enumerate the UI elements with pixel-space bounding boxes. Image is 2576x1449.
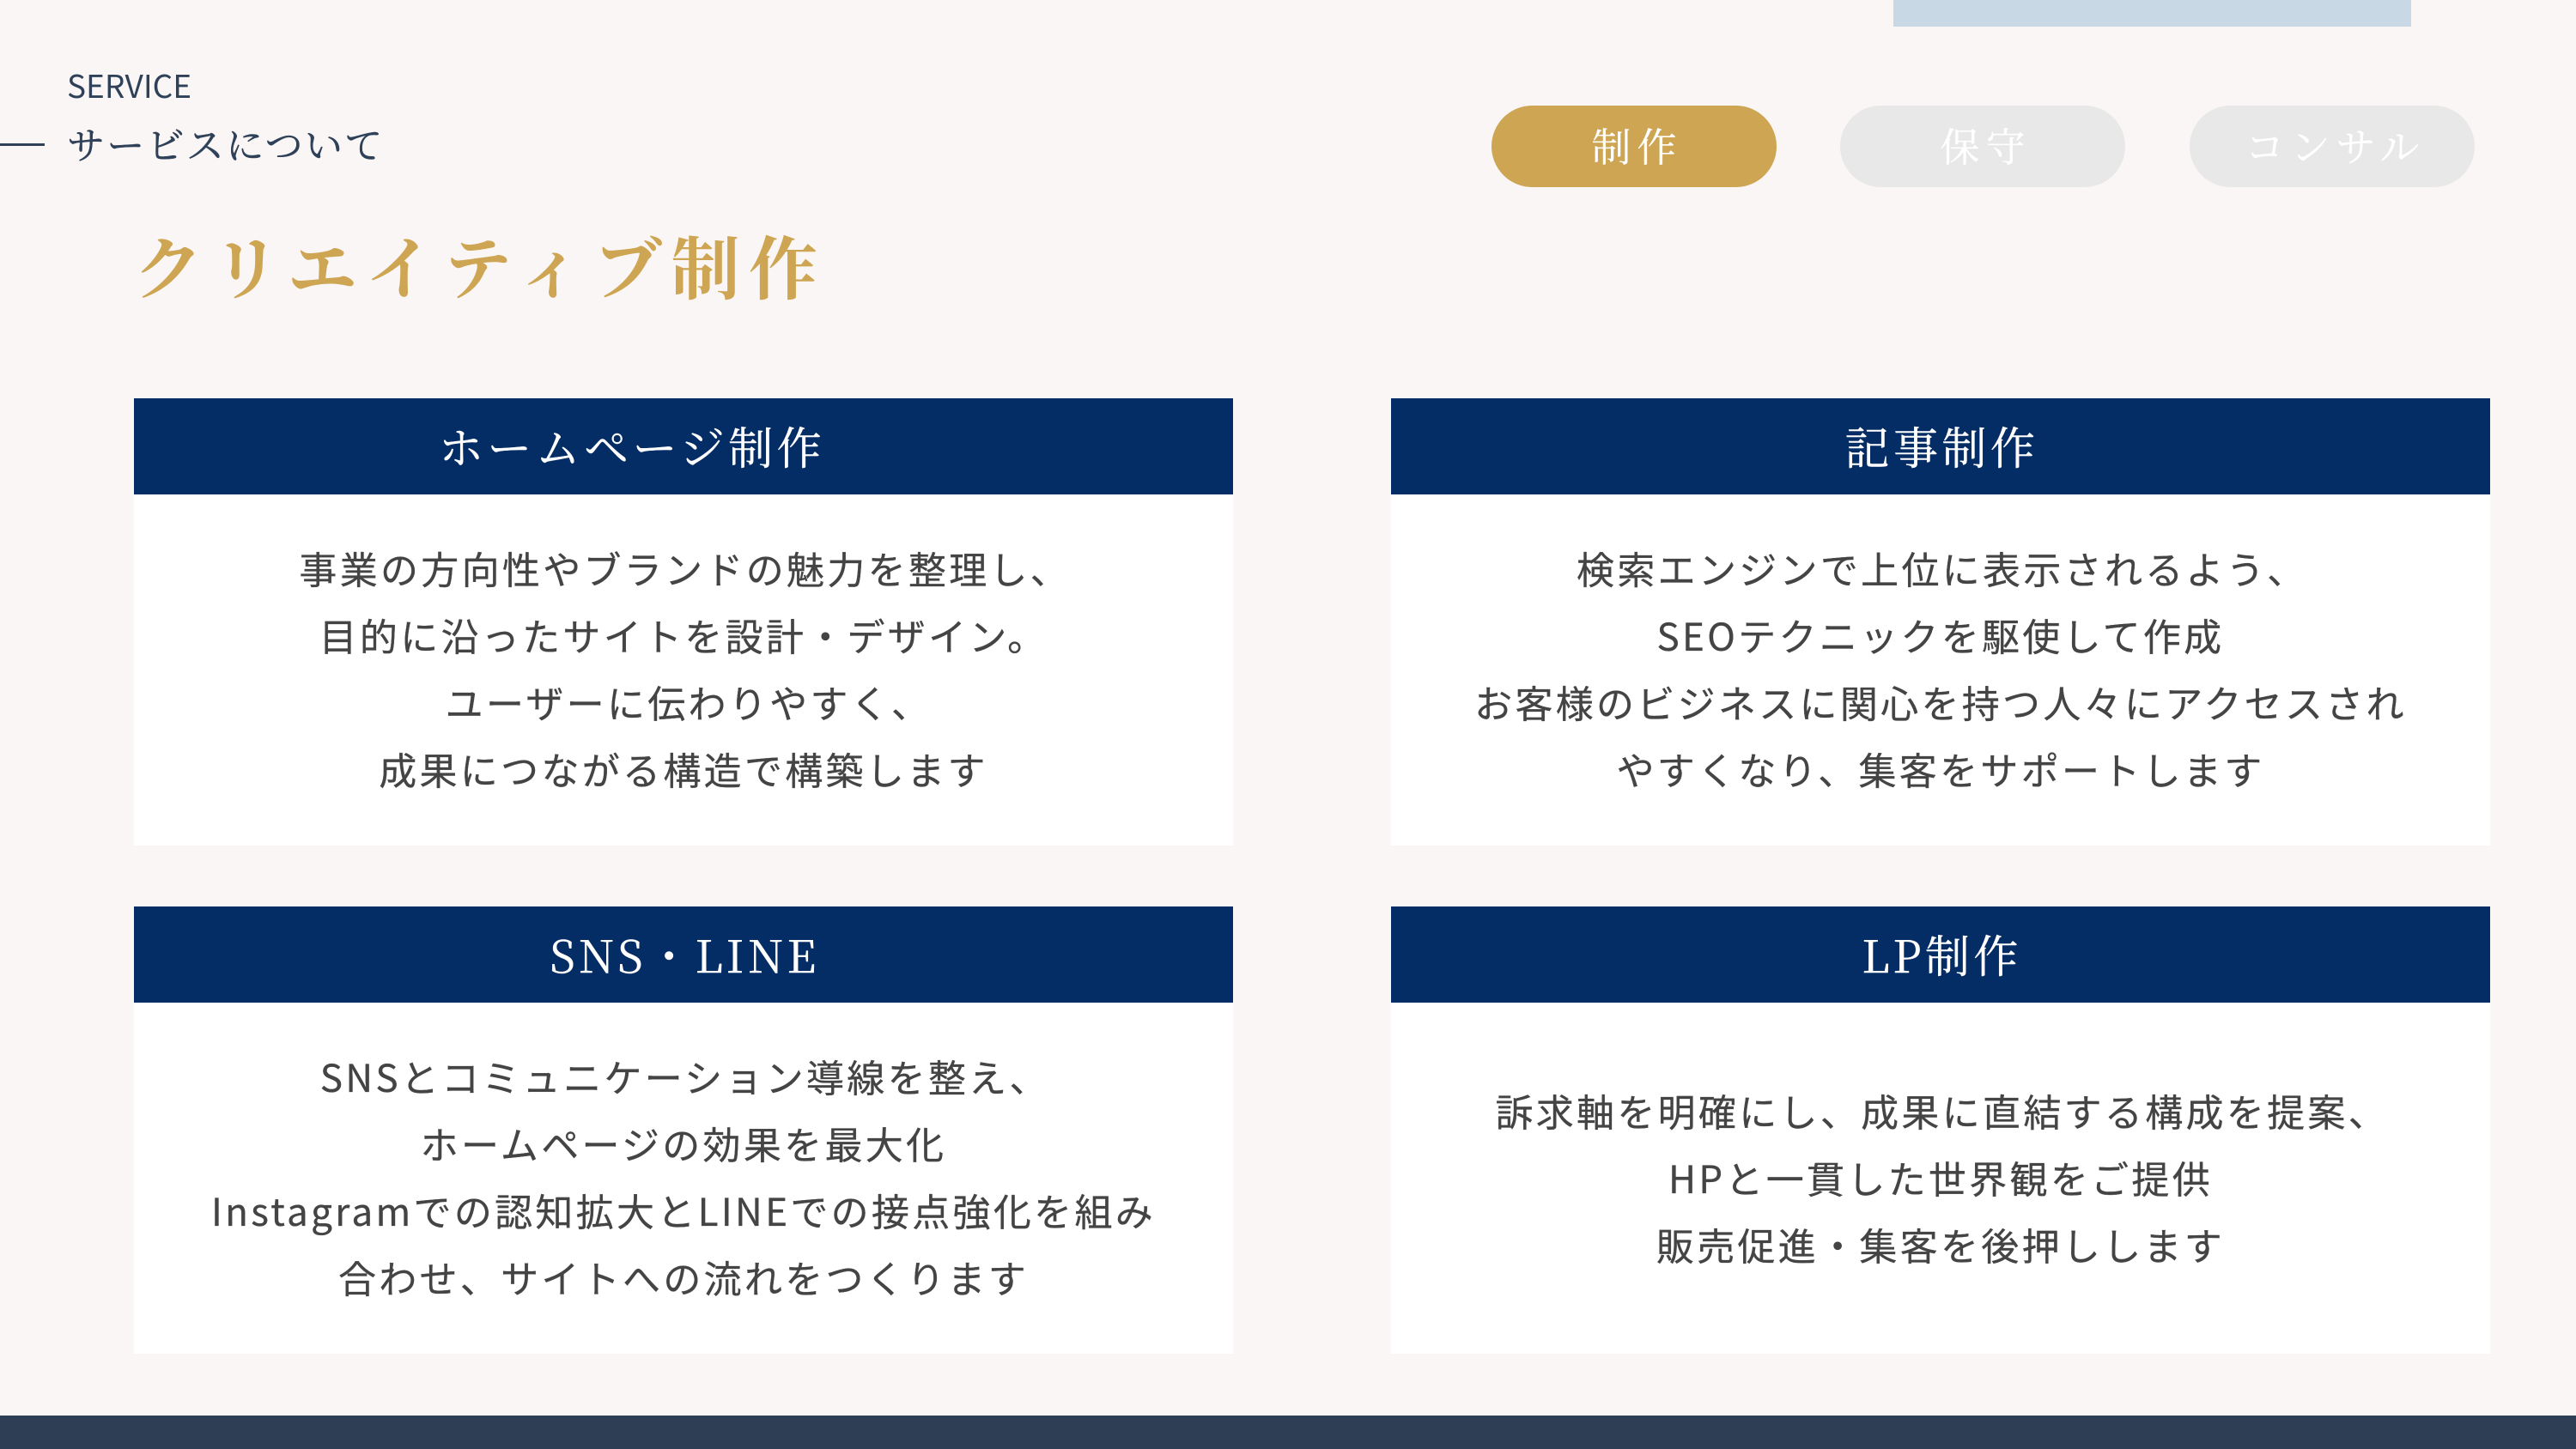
panel text: 成果につながる構造で構築します: [379, 741, 988, 796]
tab button: 制作: [1492, 106, 1777, 187]
panel heading: SNS・LINE: [550, 921, 820, 985]
panel text: ユーザーに伝わりやすく、: [446, 674, 932, 729]
panel text: [1474, 540, 2407, 796]
panel text: 目的に沿ったサイトを設計・デザイン。: [319, 607, 1048, 662]
panel: SNS・LINE: [134, 906, 1233, 1354]
panel text: ホームページの効果を最大化: [421, 1115, 946, 1170]
panel: 記事制作: [1391, 398, 2490, 846]
panel heading: ホームページ制作: [439, 413, 825, 477]
tab button: 保守: 保守: [1941, 117, 2032, 173]
panel text: Instagramでの認知拡大とLINEでの接点強化を組み: [211, 1182, 1156, 1237]
section label: SERVICE: SERVICE: [67, 61, 191, 107]
panel text: [299, 540, 1071, 796]
panel text: 合わせ、サイトへの流れをつくります: [338, 1249, 1029, 1304]
panel heading: [1391, 398, 2490, 494]
tab button: 保守: [1840, 106, 2125, 187]
panel heading: 記事制作: [1845, 413, 2038, 477]
panel text: HPと一貫した世界観をご提供: [1668, 1149, 2213, 1204]
panel heading: [134, 398, 1233, 494]
panel text: 事業の方向性やブランドの魅力を整理し、: [299, 540, 1071, 595]
panel text: 販売促進・集客を後押しします: [1656, 1216, 2225, 1271]
panel text: SNSとコミュニケーション導線を整え、: [320, 1048, 1050, 1103]
tab button: コンサル: コンサル: [2245, 117, 2425, 173]
accent line: [0, 143, 45, 146]
panel text: お客様のビジネスに関心を持つ人々にアクセスされ: [1474, 674, 2407, 729]
tab button: コンサル: [2190, 106, 2475, 187]
light blue top tab: [1893, 0, 2411, 27]
panel heading: [134, 906, 1233, 1003]
title: クリエイティブ制作: [134, 215, 826, 313]
panel heading: [1391, 906, 2490, 1003]
panel text: 訴求軸を明確にし、成果に直結する構成を提案、: [1495, 1082, 2389, 1137]
panel text: [211, 1048, 1156, 1304]
panel heading: LP制作: [1862, 921, 2022, 985]
footer bar: [0, 1416, 2576, 1449]
tab button: 制作: 制作: [1592, 117, 1683, 173]
panel text: SEOテクニックを駆使して作成: [1657, 607, 2224, 662]
panel text: 検索エンジンで上位に表示されるよう、: [1577, 540, 2307, 595]
panel text: やすくなり、集客をサポートします: [1616, 741, 2265, 796]
panel: LP制作: [1391, 906, 2490, 1354]
panel text: [1495, 1082, 2389, 1271]
section subtitle: サービスについて: [67, 115, 385, 170]
panel: ホームページ制作: [134, 398, 1233, 846]
